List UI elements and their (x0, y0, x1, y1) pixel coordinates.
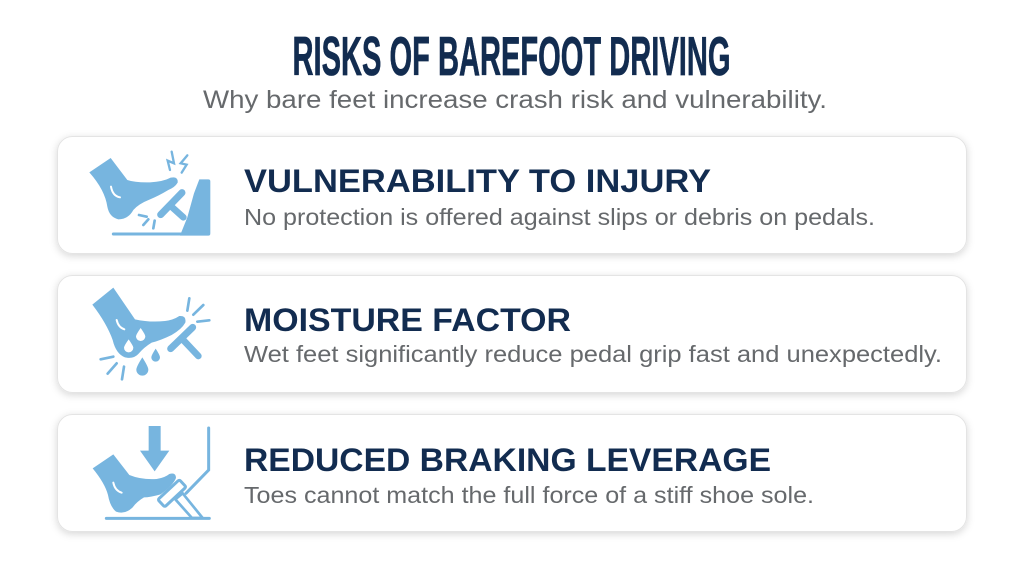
heading: REDUCED BRAKING LEVERAGE (244, 442, 771, 478)
icon: foot pressing brake with down arrow (93, 426, 209, 518)
icon: wet foot slipping on pedal (92, 288, 209, 379)
icon: foot striking pedal with sparks (89, 152, 210, 236)
heading: MOISTURE FACTOR (244, 302, 571, 338)
panel: moisture factor (58, 276, 966, 392)
panel: reduced braking leverage (58, 414, 966, 532)
description: Toes cannot match the full force of a stiff shoe sole. (244, 482, 814, 508)
description: Wet feet significantly reduce pedal grip fast and unexpectedly. (244, 341, 942, 367)
panel: vulnerability to injury (58, 136, 966, 254)
heading: VULNERABILITY TO INJURY (244, 163, 711, 199)
subtitle: Why bare feet increase crash risk and vulnerability. (203, 86, 827, 114)
description: No protection is offered against slips or debris on pedals. (244, 204, 875, 230)
